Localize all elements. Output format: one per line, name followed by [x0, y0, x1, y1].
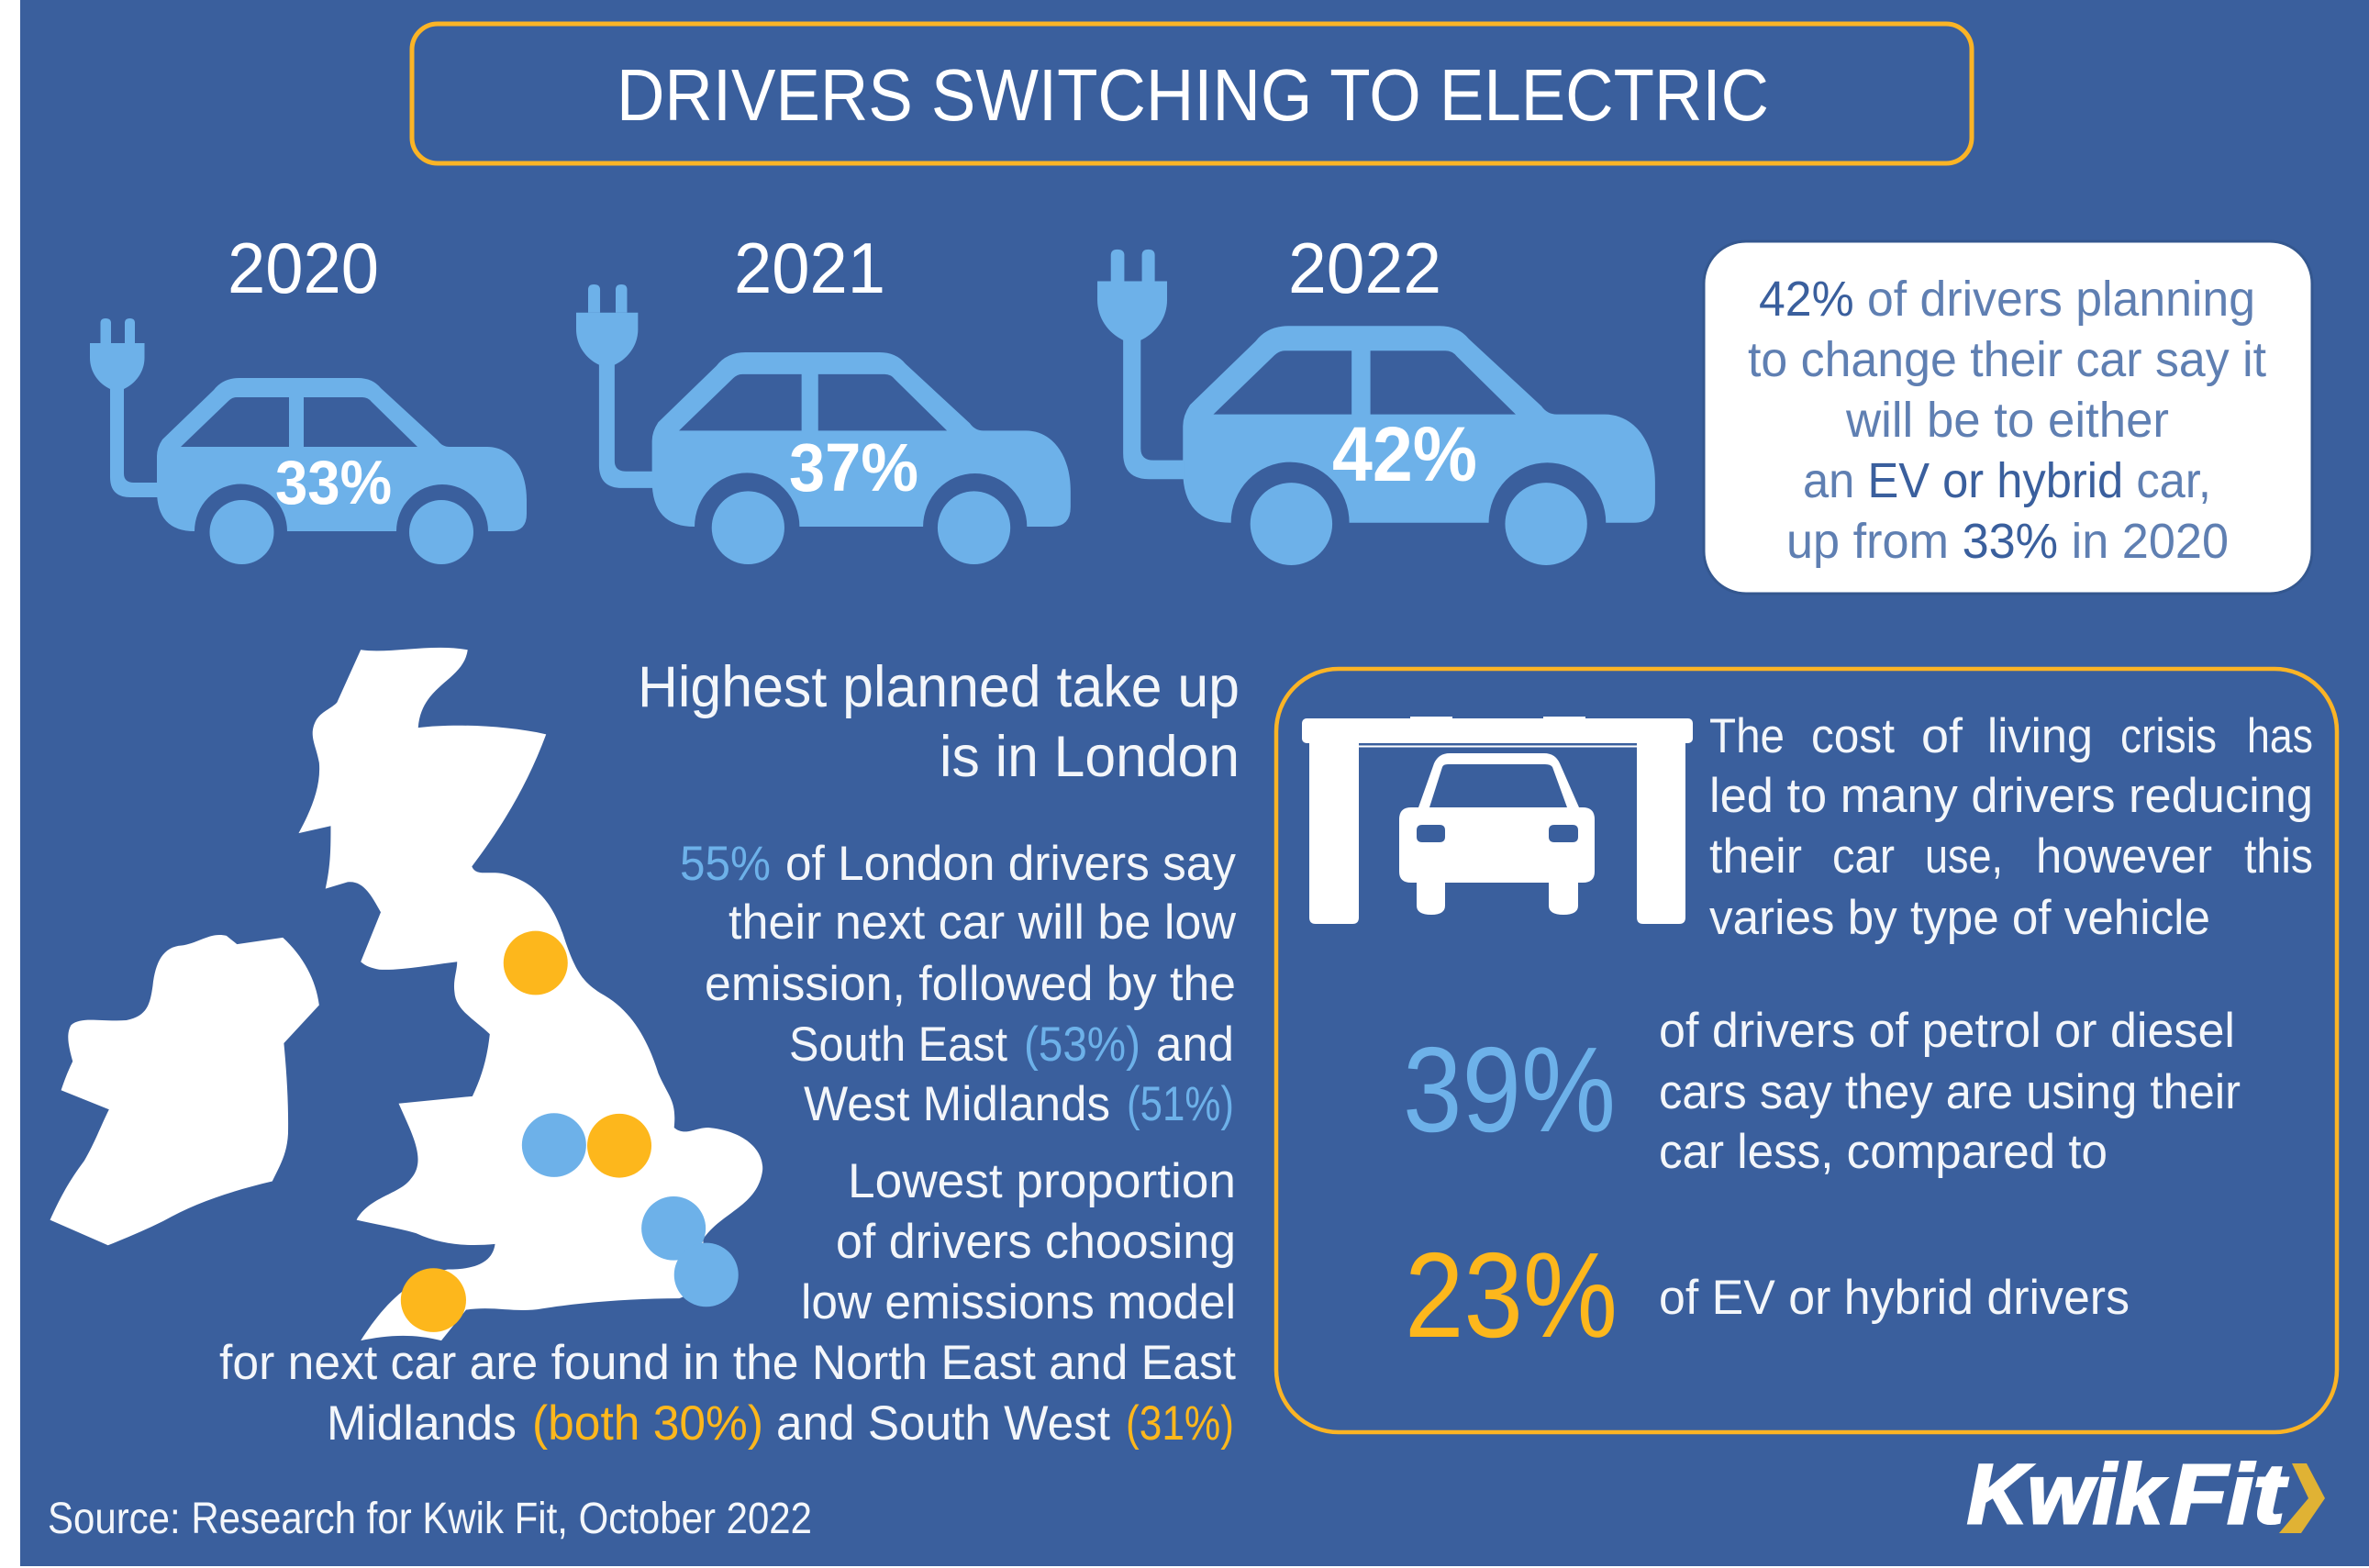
panel: 2022 car: 2022 — [1288, 228, 1441, 308]
text: London and regional figures: and — [1156, 1018, 1234, 1072]
panel: 2022 car — [1097, 228, 1655, 565]
text: London and regional figures: emission, followed by the — [705, 957, 1236, 1011]
stat: 23%: 23% — [1405, 1228, 1618, 1362]
text: cost of living intro: living — [1987, 709, 2093, 763]
logo: Kwik Fit: Kwik — [1967, 1448, 2166, 1541]
text: cost of living intro: has — [2247, 709, 2313, 763]
logo: Kwik Fit — [1967, 1448, 2325, 1541]
text: lowest proportion: (31%) — [1126, 1396, 1234, 1451]
icon: plug-in car 2022 — [1097, 250, 1655, 565]
text: London and regional figures: West Midlands — [804, 1077, 1110, 1131]
icon: plug-in car 2020 — [90, 318, 527, 564]
text: petrol or diesel drivers: car less, compared to — [1659, 1125, 2108, 1179]
callout: 42% of drivers: to change their car say it — [1748, 332, 2266, 387]
panel: 2021 car — [576, 228, 1071, 564]
text: petrol or diesel drivers: of drivers of petrol or diesel — [1659, 1004, 2235, 1058]
map: UK and Ireland — [50, 648, 762, 1340]
text: London and regional figures: (51%) — [1127, 1077, 1234, 1131]
text: London and regional figures: (53%) — [1024, 1018, 1140, 1072]
text: London and regional figures: of London drivers say — [785, 837, 1236, 891]
icon: plug-in car 2021 — [576, 284, 1071, 564]
panel: 2022 car: 42% — [1332, 411, 1477, 497]
text: lowest proportion: for next car are found in the North East and East — [219, 1336, 1236, 1390]
callout: 42% of drivers: an EV or hybrid car, — [1803, 453, 2211, 508]
panel: 2020 car: 33% — [275, 448, 392, 517]
text: lowest proportion: of drivers choosing — [836, 1215, 1236, 1269]
text: lowest proportion — [219, 1154, 1236, 1451]
text: lowest proportion: Lowest proportion — [848, 1154, 1236, 1208]
text: cost of living intro: varies by type of vehicle — [1709, 891, 2210, 945]
title: DRIVERS SWITCHING TO ELECTRIC — [617, 54, 1769, 136]
text: cost of living intro: cost — [1811, 709, 1895, 763]
text: lowest proportion: Midlands — [327, 1396, 517, 1451]
title box — [412, 24, 1972, 163]
heading: highest planned take up: is in London — [940, 725, 1240, 789]
text: cost of living intro: their — [1709, 829, 1802, 884]
callout: 42% of drivers: will be to either — [1845, 393, 2169, 448]
text: cost of living intro: this — [2244, 829, 2313, 884]
stat: 39%: 39% — [1403, 1022, 1616, 1157]
text: lowest proportion: low emissions model — [801, 1275, 1236, 1329]
Great Britain — [298, 648, 762, 1340]
panel: 2020 car — [90, 228, 527, 564]
icon: car in garage — [1302, 717, 1693, 924]
text: cost of living intro: crisis — [2120, 709, 2217, 763]
text: cost of living intro: car — [1832, 829, 1895, 884]
text: London and regional figures: 55% — [680, 837, 771, 891]
heading: highest planned take up — [638, 655, 1240, 789]
text: cost of living intro — [1709, 709, 2313, 945]
text: London and regional figures: South East — [789, 1018, 1007, 1072]
map markers — [401, 931, 739, 1332]
source note: Source: Research for Kwik Fit, October 2022 — [48, 1495, 812, 1543]
text: cost of living intro: use, — [1925, 829, 2003, 884]
panel: cost of living — [1276, 669, 2337, 1432]
text: petrol or diesel drivers: cars say they are using their — [1659, 1065, 2241, 1119]
text: lowest proportion: (both 30%) — [532, 1396, 763, 1451]
text: cost of living intro: The — [1709, 709, 1785, 763]
text: lowest proportion: and South West — [776, 1396, 1110, 1451]
text: EV or hybrid drivers: of EV or hybrid drivers — [1659, 1271, 2130, 1325]
Ireland — [50, 935, 319, 1245]
panel: 2021 car: 2021 — [734, 228, 885, 308]
callout: 42% of drivers: 42% of drivers planning — [1759, 272, 2255, 327]
callout: 42% of drivers — [1704, 241, 2312, 594]
heading: highest planned take up: Highest planned take up — [638, 655, 1240, 719]
text: London and regional figures — [680, 837, 1237, 1131]
icon: logo chevron — [2279, 1463, 2325, 1533]
logo: Kwik Fit: Fit — [2170, 1448, 2288, 1541]
callout: 42% of drivers: up from 33% in 2020 — [1786, 514, 2229, 569]
panel: 2021 car: 37% — [789, 429, 918, 506]
text: cost of living intro: led to many drivers reducing — [1709, 769, 2313, 823]
text: London and regional figures: their next car will be low — [728, 895, 1237, 950]
text: cost of living intro: of — [1921, 709, 1963, 763]
text: petrol or diesel drivers — [1659, 1004, 2241, 1179]
text: cost of living intro: however — [2036, 829, 2212, 884]
panel: 2020 car: 2020 — [228, 228, 379, 308]
